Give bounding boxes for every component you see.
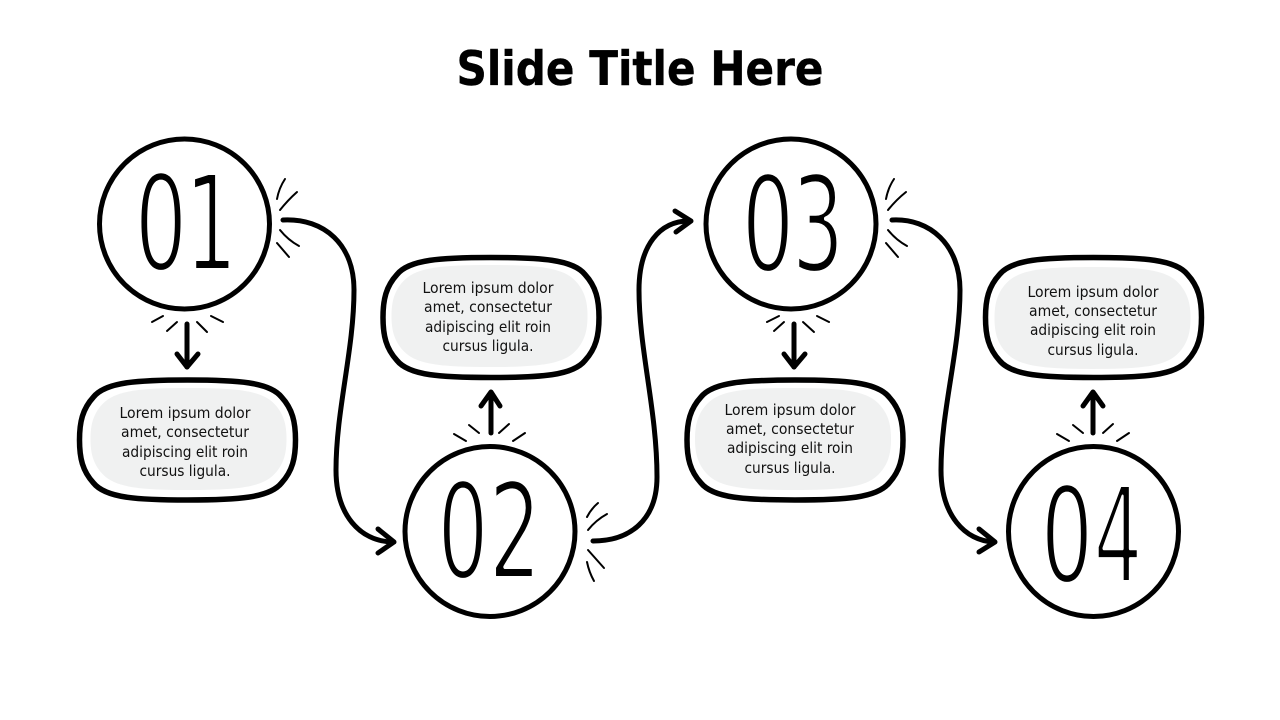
- body text: amet, consectetur: [1029, 302, 1157, 320]
- title: Slide Title Here: [456, 42, 824, 97]
- box outline: [383, 258, 599, 378]
- circle 01: [100, 139, 270, 309]
- number 01: [135, 147, 237, 302]
- number 04: [1041, 459, 1142, 614]
- box outline: [80, 380, 296, 500]
- number 01: 1: [185, 147, 237, 302]
- rays above circle 02: [454, 424, 525, 441]
- step 04: [1008, 392, 1178, 616]
- connector: 01 to 02: [283, 220, 394, 553]
- arrow down from 01: [177, 324, 198, 367]
- text box 04: [986, 258, 1202, 378]
- rays right of circle 01: [277, 179, 299, 257]
- number 02: [438, 454, 541, 610]
- text box 03: [687, 380, 903, 500]
- body text: adipiscing elit roin: [425, 318, 551, 336]
- step 03: [706, 139, 907, 367]
- number 02: 2: [489, 455, 541, 610]
- body text: Lorem ipsum dolor: [422, 279, 554, 297]
- text box 02: [383, 258, 599, 378]
- body text: amet, consectetur: [726, 420, 854, 438]
- body text: cursus ligula.: [140, 462, 230, 480]
- box outline: [687, 380, 903, 500]
- arrow up from 04: [1083, 392, 1103, 433]
- rays below circle 01: [152, 316, 223, 332]
- body text: Lorem ipsum dolor: [724, 401, 856, 419]
- body text: amet, consectetur: [121, 423, 249, 441]
- body text: [724, 401, 856, 477]
- body text: cursus ligula.: [744, 459, 836, 477]
- body text: [422, 279, 554, 355]
- body text: amet, consectetur: [424, 298, 552, 316]
- number 01: 0: [135, 147, 187, 302]
- rays below circle 03: [767, 316, 829, 332]
- number 03: 0: [742, 148, 794, 303]
- box fill: [90, 388, 286, 490]
- body text: adipiscing elit roin: [122, 443, 248, 461]
- rays right of circle 02: [587, 503, 607, 581]
- circle 02: [405, 446, 575, 616]
- rays right of circle 03: [886, 179, 907, 257]
- circle 04: [1008, 446, 1178, 616]
- text box 01: [80, 380, 296, 500]
- box fill: [392, 265, 588, 367]
- body text: Lorem ipsum dolor: [1028, 283, 1159, 301]
- circle 03: [706, 139, 876, 309]
- number 03: 3: [792, 148, 844, 303]
- body text: [1028, 283, 1159, 359]
- rays above circle 04: [1057, 424, 1129, 441]
- step 01: [100, 139, 299, 367]
- arrow down from 03: [784, 324, 805, 367]
- number 02: 0: [438, 454, 488, 610]
- box fill: [994, 267, 1190, 369]
- box outline: [986, 258, 1202, 378]
- body text: cursus ligula.: [442, 337, 534, 355]
- number 03: [742, 148, 844, 303]
- body text: adipiscing elit roin: [1030, 321, 1156, 339]
- number 04: 0: [1041, 459, 1093, 614]
- body text: [120, 404, 251, 480]
- body text: cursus ligula.: [1048, 341, 1138, 359]
- body text: Lorem ipsum dolor: [120, 404, 251, 422]
- arrow up from 02: [481, 392, 500, 433]
- body text: adipiscing elit roin: [727, 439, 853, 457]
- step 02: [405, 392, 607, 616]
- number 04: 4: [1094, 459, 1142, 614]
- connector: 03 to 04: [892, 220, 995, 552]
- connector: 02 to 03: [593, 211, 691, 541]
- box fill: [695, 388, 891, 490]
